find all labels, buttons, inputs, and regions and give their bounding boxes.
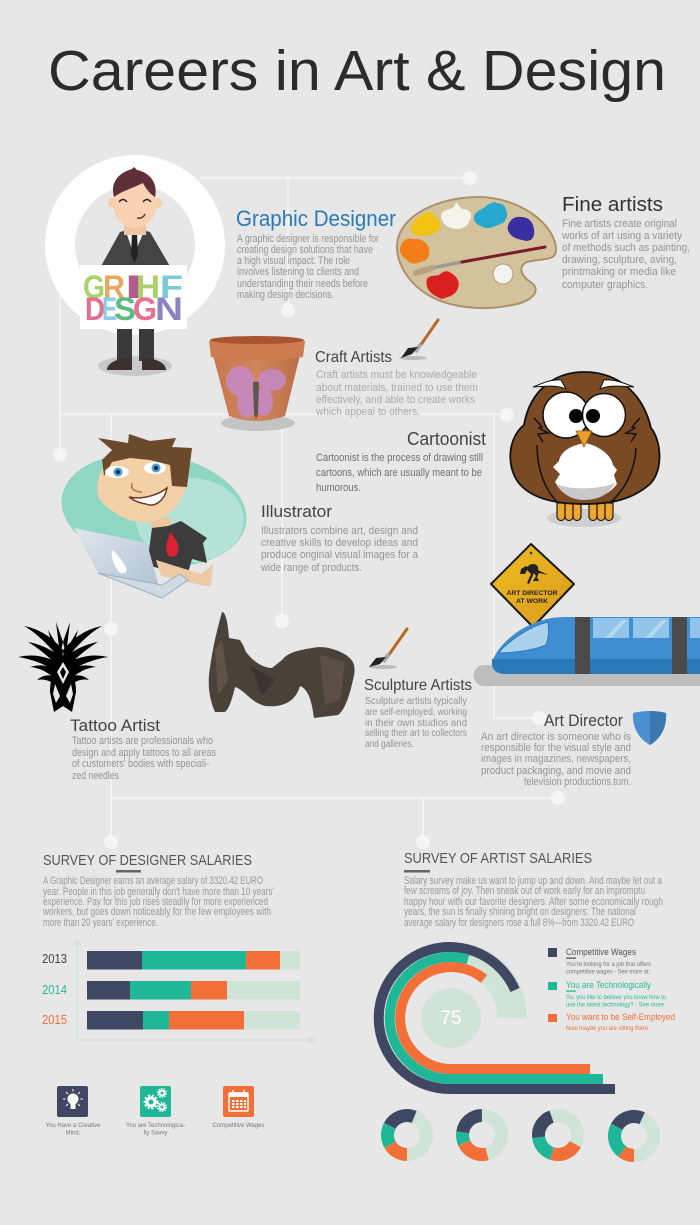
icon: shield: [633, 711, 666, 745]
text: art director: responsible for the visual style and: [481, 742, 631, 754]
illustration: paint palette: [397, 197, 556, 308]
legend: Now maybe you are sitting there: [566, 1026, 649, 1032]
text: sculpture artists: and galleries.: [365, 739, 414, 750]
text: sculpture artists: selling their art to collectors: [365, 728, 467, 739]
donut 3: [532, 1109, 584, 1161]
text: craft artists: Craft Artists: [315, 349, 392, 366]
icon: technologically savvy: You are Technologica-: [126, 1123, 185, 1129]
tattoo: left half: [18, 622, 63, 712]
illustration: sculpture: [209, 612, 355, 718]
text: illustrator: creative skills to develop ideas and: [261, 537, 418, 549]
text: sculpture artists: Sculpture Artists: [364, 677, 472, 694]
text: sculpture artists: Sculpture artists typically: [365, 696, 467, 707]
text: sculpture artists: are self-employed, working: [365, 707, 467, 718]
text: fine artists: of methods such as painting,: [562, 242, 690, 254]
legend: You're looking for a job that offers: [566, 962, 651, 968]
illustration: flower pot: [209, 336, 305, 431]
sign: graphic design: [80, 265, 187, 329]
text: fine artists: printmaking or media like: [562, 266, 676, 278]
text: tattoo artist: Tattoo artists are professionals who: [72, 735, 213, 747]
text: graphic designer: Graphic Designer: [236, 206, 396, 231]
donut 2: [456, 1109, 508, 1161]
bar chart: salaries by year: 2015: [42, 1012, 67, 1027]
section: survey of artist salaries: SURVEY OF ARTIST SALARIES: [404, 850, 592, 867]
icon: paint brush: [399, 320, 438, 360]
icon: technologically savvy: [126, 1086, 185, 1136]
sign: graphic design: F: [160, 269, 183, 305]
legend: use the latest technology? - See more: [566, 1002, 665, 1008]
sign: graphic design: E: [102, 291, 117, 327]
text: tattoo artist: Tattoo Artist: [70, 716, 160, 735]
text: fine artists: Fine artists: [562, 194, 663, 216]
illustration: art director sign: [491, 544, 574, 627]
text: craft artists: Craft artists must be knowledgeable: [316, 369, 477, 381]
text: illustrator: produce original visual images for a: [261, 549, 419, 561]
legend: [548, 947, 675, 1032]
connector lines: [53, 171, 565, 849]
legend: You want to be Self-Employed: [566, 1012, 675, 1022]
text: craft artists: effectively, and able to create works: [316, 394, 475, 406]
legend: Competitive Wages: [566, 947, 636, 957]
text: art director: Art Director: [544, 711, 623, 730]
section: survey of artist salaries: [404, 850, 663, 929]
icon: technologically savvy: lly Savvy: [144, 1130, 167, 1136]
text: art director: An art director is someone who is: [481, 731, 631, 743]
text: cartoonist: cartoons, which are usually meant to be: [316, 467, 482, 479]
text: tattoo artist: [70, 716, 216, 782]
text: fine artists: [561, 194, 690, 291]
legend: So, you like to believe you know how to: [566, 995, 667, 1001]
sign: graphic design: S: [114, 291, 136, 327]
section: survey of designer salaries: workers, but goes down noticeably for the few employees with: [42, 906, 271, 918]
text: fine artists: works of art using a variety: [561, 230, 682, 242]
text: graphic designer: understanding their needs before: [237, 278, 368, 290]
text: craft artists: about materials, trained to use them: [316, 382, 478, 394]
section: survey of designer salaries: more than 20 years' experience.: [43, 917, 158, 929]
text: fine artists: Fine artists create original: [562, 218, 677, 230]
icon: creative mind: You Have a Creative: [46, 1123, 101, 1129]
text: cartoonist: [316, 429, 486, 494]
text: illustrator: Illustrator: [261, 502, 332, 521]
text: art director: product packaging, and movie and: [481, 765, 631, 777]
text: graphic designer: making design decisions.: [237, 289, 334, 301]
text: fine artists: drawing, sculpture, aving,: [562, 254, 677, 266]
bar chart: salaries by year: [42, 940, 316, 1044]
sign: graphic design: G: [83, 269, 105, 305]
illustration: tribal tattoo: [18, 622, 108, 712]
sign: graphic design: D: [85, 291, 105, 327]
illustration: illustrator at laptop: [54, 434, 254, 598]
text: cartoonist: Cartoonist: [407, 429, 486, 449]
tattoo: right half: [63, 622, 108, 712]
radial bar chart: [379, 947, 615, 1089]
section: survey of designer salaries: year. People in this job generally don't have more than 10 years': [43, 886, 274, 898]
donut charts: [380, 1108, 661, 1163]
illustration: train: [474, 617, 700, 686]
illustration: owl: [510, 372, 660, 527]
text: tattoo artist: of customers' bodies with speciali-: [72, 758, 209, 770]
icon: competitive wages: [213, 1086, 264, 1129]
text: craft artists: which appeal to others.: [315, 406, 420, 418]
icon: creative mind: Mind.: [66, 1130, 81, 1136]
text: tattoo artist: zed needles: [72, 770, 119, 782]
text: craft artists: [315, 349, 478, 418]
donut 1: [380, 1108, 434, 1162]
text: graphic designer: involves listening to clients and: [237, 266, 359, 278]
illustration: graphic designer: [60, 167, 210, 376]
radial bar chart: 75: [440, 1008, 462, 1029]
icon: creative mind: [46, 1086, 101, 1136]
text: graphic designer: A graphic designer is responsible for: [237, 233, 379, 245]
sign: graphic design: H: [136, 269, 160, 305]
text: sculpture artists: [364, 677, 472, 750]
text: fine artists: computer graphics.: [562, 279, 648, 291]
sign: graphic design: I: [124, 269, 144, 305]
legend: You are Technologically: [566, 980, 651, 990]
section: survey of designer salaries: A Graphic Designer earns an average salary of 3320.42 EURO: [43, 875, 263, 887]
bar chart: salaries by year: 2014: [42, 982, 67, 997]
illustration: art director sign: AT WORK: [516, 598, 548, 605]
text: art director: [481, 711, 631, 788]
icon: paint brush: [369, 629, 407, 669]
text: graphic designer: [236, 206, 396, 301]
sign: graphic design: R: [103, 269, 125, 305]
text: cartoonist: Cartoonist is the process of drawing still: [316, 452, 483, 464]
text: illustrator: [260, 502, 419, 574]
section: survey of designer salaries: SURVEY OF DESIGNER SALARIES: [43, 852, 252, 869]
text: cartoonist: humorous.: [316, 482, 361, 494]
sign: graphic design: N: [155, 291, 183, 327]
text: graphic designer: creating design solutions that have: [237, 244, 373, 256]
bar chart: salaries by year: 2013: [42, 951, 67, 966]
text: graphic designer: a high visual impact. The role: [237, 255, 350, 267]
section: survey of designer salaries: [42, 852, 274, 929]
icon: competitive wages: Competitive Wages: [213, 1123, 264, 1129]
text: art director: television productions.tum.: [524, 776, 631, 788]
donut 4: [607, 1109, 661, 1163]
legend: competitive wages - See more at:: [566, 970, 650, 976]
section: survey of designer salaries: experience. Pay for this job rises steadily for more experienced: [43, 896, 268, 908]
sign: graphic design: G: [133, 291, 157, 327]
text: illustrator: wide range of products.: [260, 562, 362, 574]
illustration: art director sign: ART DIRECTOR: [506, 590, 558, 597]
text: sculpture artists: in their own studios and: [365, 718, 467, 729]
title: Careers in Art & Design: [48, 39, 666, 103]
text: illustrator: Illustrators combine art, design and: [261, 525, 418, 537]
text: tattoo artist: design and apply tattoos to all areas: [72, 747, 216, 759]
text: art director: images in magazines, newspapers,: [481, 753, 631, 765]
